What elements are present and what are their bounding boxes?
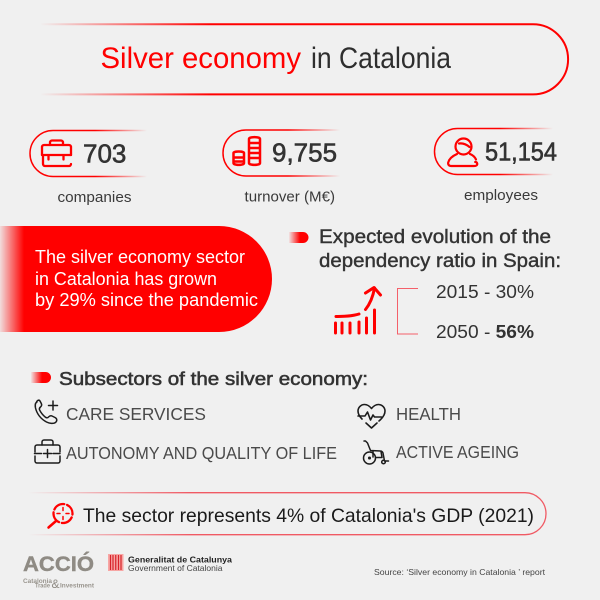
title text: Silver economy bbox=[100, 42, 301, 75]
callout text: by 29% since the pandemic bbox=[35, 290, 258, 310]
value: 2050: 2050 - 56% bbox=[436, 322, 534, 342]
stat: employees bbox=[434, 128, 557, 204]
icon: magnifier target bbox=[48, 504, 72, 528]
logo: ACCIÓ: ACCIÓ bbox=[23, 551, 94, 576]
heading: dependency ratio: dependency ratio in Spain: bbox=[319, 251, 561, 272]
heading: subsectors: Subsectors of the silver economy: bbox=[59, 368, 368, 389]
logo: Generalitat de Catalunya: Generalitat de Catalunya bbox=[128, 554, 232, 564]
value: 9,755: 9,755 bbox=[272, 138, 337, 168]
icon: first aid kit bbox=[34, 440, 60, 463]
label: autonomy: AUTONOMY AND QUALITY OF LIFE bbox=[66, 443, 337, 463]
callout text: The silver economy sector bbox=[35, 247, 245, 267]
icon: person bbox=[448, 138, 477, 166]
icon: coins bbox=[234, 137, 260, 165]
bullet bbox=[289, 232, 308, 243]
logo: Generalitat de Catalunya: Government of Catalonia bbox=[128, 563, 223, 573]
label: employees: employees bbox=[464, 188, 538, 204]
icon: heart pulse bbox=[358, 404, 385, 428]
panel: growth callout bbox=[0, 226, 272, 332]
value: 51,154: 51,154 bbox=[485, 136, 557, 166]
title panel bbox=[40, 24, 568, 94]
callout text bbox=[35, 247, 258, 310]
logo: ACCIÓ: & bbox=[52, 577, 60, 591]
logo: ACCIÓ: Trade bbox=[35, 582, 51, 590]
panel: dependency ratio bbox=[289, 227, 561, 342]
stat: turnover bbox=[223, 130, 340, 206]
panel: GDP bbox=[28, 493, 546, 535]
logo: ACCIÓ: Catalonia bbox=[23, 578, 53, 585]
logo: Generalitat de Catalunya bbox=[108, 554, 232, 573]
heading: dependency ratio: Expected evolution of the bbox=[319, 227, 551, 248]
title text bbox=[100, 42, 452, 75]
icon: phone plus bbox=[35, 400, 58, 423]
logo: ACCIÓ: Investment bbox=[60, 582, 94, 590]
bullet bbox=[31, 372, 51, 383]
label: active ageing: ACTIVE AGEING bbox=[396, 442, 519, 462]
logo: ACCIÓ bbox=[23, 551, 94, 591]
heading: dependency ratio bbox=[319, 227, 561, 272]
stat: companies bbox=[30, 130, 147, 206]
label: care services: CARE SERVICES bbox=[66, 404, 206, 424]
panel: subsectors bbox=[31, 368, 519, 464]
value: 703: 703 bbox=[83, 138, 126, 168]
icon: growth chart bbox=[336, 288, 380, 333]
icon: wheelchair bbox=[364, 441, 388, 464]
label: turnover: turnover (M€) bbox=[244, 190, 335, 206]
icon: senyera bbox=[108, 554, 124, 571]
icon: briefcase bbox=[42, 140, 71, 166]
title text: in Catalonia bbox=[311, 42, 452, 75]
source note: Source: ‘Silver economy in Catalonia ’ report bbox=[374, 568, 546, 577]
label: health: HEALTH bbox=[396, 404, 461, 424]
bracket bbox=[398, 288, 418, 334]
callout text: in Catalonia has grown bbox=[35, 269, 217, 289]
value: 2015: 2015 - 30% bbox=[436, 282, 534, 302]
label: companies: companies bbox=[58, 190, 132, 206]
GDP text: The sector represents 4% of Catalonia's GDP (2021) bbox=[83, 505, 534, 527]
